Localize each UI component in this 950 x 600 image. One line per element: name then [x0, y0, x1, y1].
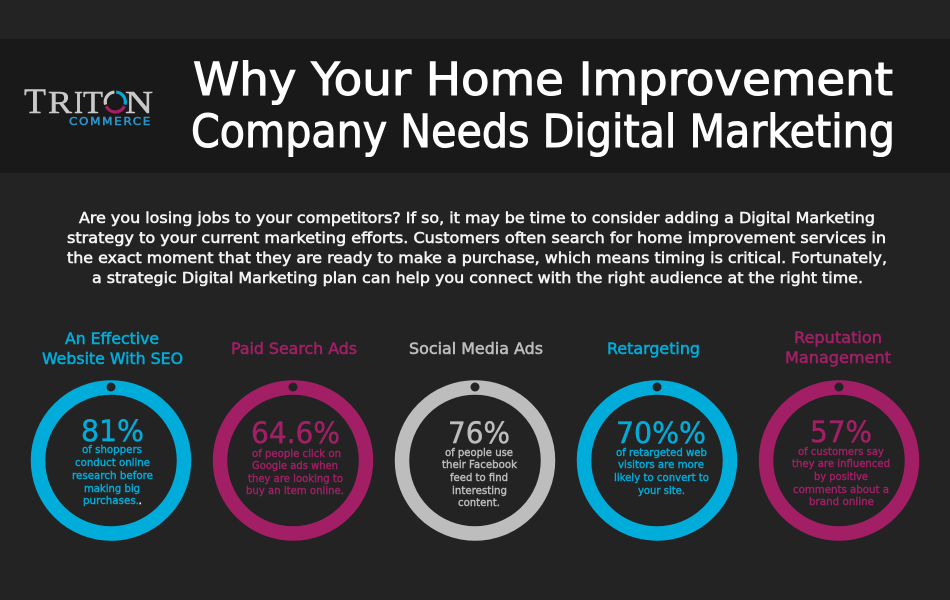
description: content. — [458, 496, 500, 509]
description — [442, 446, 518, 509]
statistic 70%%: 70%% — [616, 416, 706, 450]
description: they are looking to — [248, 472, 343, 485]
panel: Reputation Management — [766, 328, 912, 534]
description: . — [138, 494, 142, 507]
header band — [0, 39, 950, 173]
description: they are influenced — [792, 457, 890, 470]
ring — [402, 382, 548, 534]
description: making big — [84, 482, 140, 495]
title: Why Your Home Improvement — [193, 53, 893, 106]
description — [792, 445, 890, 508]
heading — [785, 328, 891, 367]
heading: Social Media Ads — [409, 339, 543, 358]
statistic 57%: 57% — [810, 415, 872, 449]
heading: Retargeting — [607, 339, 700, 358]
logo: Triton Commerce: N — [125, 84, 153, 120]
heading: Reputation — [794, 328, 882, 347]
description: interesting — [452, 484, 507, 497]
description: comments about a — [793, 483, 889, 496]
description — [72, 443, 153, 507]
logo: Triton Commerce: T — [24, 81, 46, 121]
heading: Management — [785, 348, 891, 367]
logo: Triton Commerce: COMMERCE — [69, 115, 152, 128]
panel: Social Media Ads — [402, 339, 548, 534]
description: brand online — [809, 495, 874, 508]
description: likely to convert to — [614, 471, 709, 484]
ring — [38, 382, 184, 534]
logo: Triton Commerce: T — [83, 84, 103, 120]
logo: Triton Commerce: I — [74, 84, 83, 120]
intro paragraph: strategy to your current marketing efforts. Customers often search for home improvement services in — [67, 229, 886, 247]
statistic 76%: 76% — [448, 416, 510, 450]
description: their Facebook — [442, 458, 518, 471]
description: of customers say — [798, 445, 884, 458]
description: your site. — [638, 484, 685, 497]
description: Google ads when — [252, 459, 338, 472]
description: purchases. — [83, 494, 139, 507]
description: buy an item online. — [246, 484, 344, 497]
ring — [220, 382, 366, 534]
title — [191, 53, 895, 158]
intro paragraph: Are you losing jobs to your competitors? If so, it may be time to consider adding a Digital Marketing — [79, 209, 875, 227]
description: conduct online — [75, 456, 150, 469]
heading — [42, 329, 183, 368]
heading: Paid Search Ads — [231, 339, 357, 358]
description: of retargeted web — [616, 446, 707, 459]
description: by positive — [814, 470, 868, 483]
statistic 81%: 81% — [81, 414, 144, 448]
statistic 64.6%: 64.6% — [251, 416, 340, 450]
intro paragraph: the exact moment that they are ready to make a purchase, which means timing is critical. Fortunately, — [67, 249, 887, 267]
description — [614, 446, 709, 497]
description: of people click on — [252, 447, 341, 460]
intro paragraph: a strategic Digital Marketing plan can help you connect with the right audience at the right time. — [92, 269, 863, 287]
description — [246, 447, 344, 497]
logo: Triton Commerce: R — [48, 84, 73, 120]
ring — [584, 382, 730, 534]
panel: Paid Search Ads — [220, 339, 366, 534]
heading: Website With SEO — [42, 349, 183, 368]
ring — [766, 382, 912, 534]
heading: An Effective — [65, 329, 159, 348]
description: of shoppers — [82, 443, 142, 456]
description: of people use — [445, 446, 513, 459]
description: visitors are more — [618, 458, 704, 471]
description: research before — [72, 469, 153, 482]
logo: Triton Commerce — [24, 81, 153, 128]
title: Company Needs Digital Marketing — [191, 105, 895, 158]
panel: An Effective Website With SEO — [38, 329, 184, 534]
intro paragraph — [67, 209, 887, 287]
panel: Retargeting — [584, 339, 730, 534]
description: feed to find — [450, 471, 508, 484]
